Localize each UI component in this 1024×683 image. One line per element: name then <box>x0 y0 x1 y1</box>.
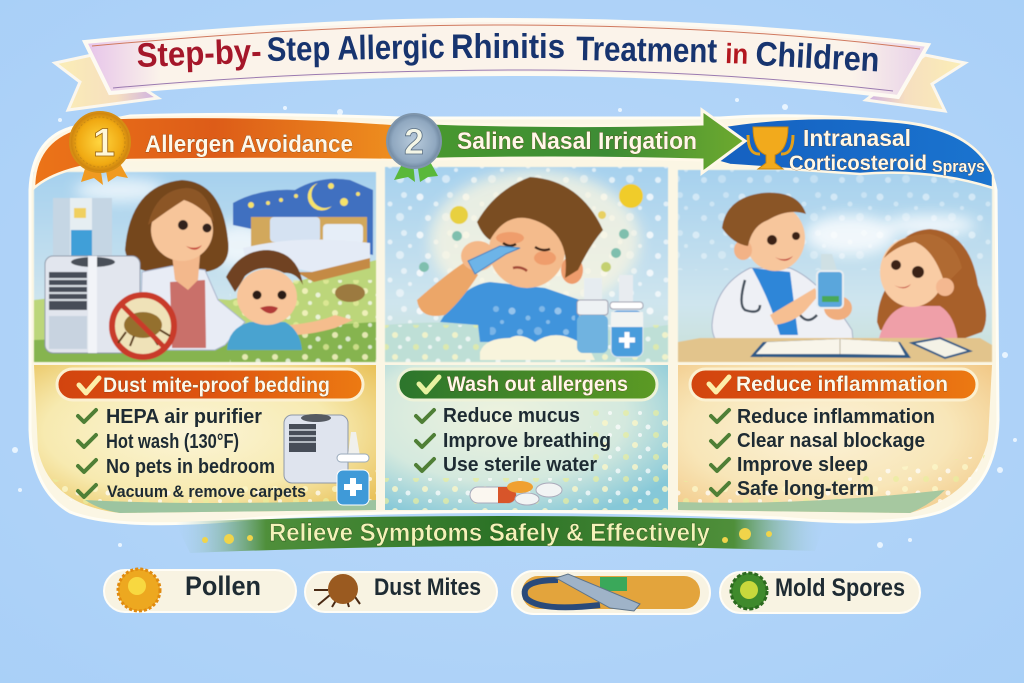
hair <box>477 177 603 278</box>
hair <box>722 193 806 246</box>
foam <box>480 335 595 360</box>
blue shirt <box>752 268 798 335</box>
icon: dust mite <box>314 590 360 607</box>
table <box>678 338 992 362</box>
title text: Children <box>755 35 880 79</box>
eyes <box>891 260 901 270</box>
pill heading: wash out allergens <box>398 369 657 400</box>
foam speckles <box>385 325 668 362</box>
mouth <box>513 267 527 271</box>
checklist: Vacuum & remove carpets <box>107 482 306 501</box>
panel: saline nasal irrigation <box>385 167 668 510</box>
eyes <box>178 220 188 230</box>
allergen chip: pollen: Pollen <box>185 571 261 601</box>
wood floor <box>522 576 700 609</box>
icon: trophy <box>748 127 793 169</box>
heading: intranasal corticosteroid sprays: Corticosteroid <box>789 152 927 175</box>
mother <box>125 180 245 350</box>
title text: in <box>725 38 749 70</box>
allergen chip: mold spores <box>720 572 920 613</box>
head <box>745 205 805 271</box>
medal: 2: 2 <box>404 121 424 162</box>
bed <box>243 217 370 282</box>
title banner body <box>85 20 928 97</box>
shirt <box>227 322 302 350</box>
mouth <box>894 284 911 288</box>
moon <box>308 183 332 210</box>
nasal spray <box>468 246 520 274</box>
sparkles <box>12 98 1017 548</box>
bottle left <box>577 278 608 353</box>
allergen chip: mold spores: Mold Spores <box>775 574 905 602</box>
title border top <box>92 25 920 49</box>
checklist: Improve breathing <box>443 430 611 452</box>
ribbon tail: left <box>55 55 158 110</box>
shirt <box>170 280 206 348</box>
arm and hand <box>770 288 818 325</box>
ear <box>734 240 752 260</box>
ribbon text: Relieve Symptoms Safely & Effectively <box>269 519 710 547</box>
ear <box>561 256 583 284</box>
pollen yellow <box>619 184 643 208</box>
checklist <box>78 406 306 501</box>
title text: Step-by- <box>136 33 262 75</box>
ribbon flowers <box>202 528 772 544</box>
doctor <box>712 193 853 348</box>
hair <box>226 250 303 292</box>
lower panel speckles <box>385 410 668 510</box>
title banner <box>55 20 965 111</box>
vacuum hose <box>525 580 600 607</box>
coat <box>712 268 853 348</box>
panel: allergen avoidance <box>34 172 376 513</box>
step 3 header band <box>712 118 993 188</box>
pollen yellow small <box>450 206 468 224</box>
lower panel: reduce inflammation list <box>678 365 992 513</box>
green ribbon banner <box>175 516 825 553</box>
checklist: HEPA air purifier <box>106 406 262 428</box>
checklist: Hot wash (130°F) <box>106 431 239 453</box>
small book <box>912 338 970 358</box>
stars <box>248 183 360 208</box>
head <box>489 212 565 288</box>
ear <box>936 278 954 296</box>
icon: pollen <box>118 569 160 611</box>
allergen chip: dust mites <box>305 572 497 612</box>
scene background <box>678 170 992 362</box>
lower panel bottom edge <box>678 490 945 513</box>
scene: child using nasal spray <box>385 167 668 362</box>
bottle <box>817 254 843 308</box>
stethoscope <box>742 280 817 320</box>
lower panel background <box>34 365 376 513</box>
coat <box>140 266 245 350</box>
pill heading: dust mite-proof bedding: Dust mite-proof bedding <box>103 374 330 397</box>
lower panel: wash out list <box>385 365 668 510</box>
ribbon tail: right <box>866 55 965 111</box>
mouth <box>775 256 793 261</box>
holding hand <box>824 296 852 320</box>
face <box>151 199 213 261</box>
lower panel background <box>678 365 992 513</box>
icon: air purifier <box>284 414 348 483</box>
vacuum wand <box>556 574 640 611</box>
green arrow <box>400 110 745 173</box>
shirt speckles <box>490 305 575 341</box>
title border bottom <box>113 70 893 91</box>
glow around child <box>430 170 640 310</box>
main panel frame <box>30 114 998 524</box>
girl <box>877 229 986 342</box>
mouth <box>260 306 278 314</box>
scene: doctor and girl <box>678 170 992 362</box>
checklist: Safe long-term <box>737 478 874 500</box>
pill heading: dust mite-proof bedding <box>57 369 363 400</box>
icon: spray bottle <box>337 432 369 505</box>
eyes <box>767 235 777 245</box>
lower panel meadow <box>45 470 376 513</box>
grass <box>34 260 376 362</box>
lower panel bottom edge <box>85 500 376 513</box>
title text: Rhinitis <box>451 28 565 66</box>
eyes <box>252 290 262 300</box>
allergen chip: vacuum on wood floor <box>512 571 710 614</box>
scene background <box>34 172 376 362</box>
checklist: Improve sleep <box>737 454 868 476</box>
checklist <box>416 405 611 476</box>
hair back <box>877 229 986 340</box>
medal: 1 <box>70 112 130 185</box>
title text: Step Allergic <box>266 28 445 69</box>
green box <box>600 577 627 591</box>
checklist: Clear nasal blockage <box>737 430 925 452</box>
clouds <box>805 215 975 255</box>
shirt <box>878 306 958 342</box>
pill heading: reduce inflammation <box>690 369 977 400</box>
shirt <box>440 282 580 342</box>
lower panel background <box>385 365 668 510</box>
blue band <box>712 118 993 188</box>
bottle right <box>610 275 643 357</box>
hair back <box>125 180 229 272</box>
checklist: Reduce inflammation <box>737 406 935 428</box>
checklist: Reduce mucus <box>443 405 580 427</box>
mouth <box>186 245 202 250</box>
checklist: No pets in bedroom <box>106 456 275 478</box>
neck <box>172 255 200 290</box>
step 2 header arrow <box>387 110 745 182</box>
fringe <box>884 234 962 285</box>
medal: 1: 1 <box>93 121 115 165</box>
heading: intranasal corticosteroid sprays <box>789 125 985 176</box>
title text <box>136 28 880 79</box>
open book <box>750 339 911 358</box>
air purifier <box>45 256 140 353</box>
heading: intranasal corticosteroid sprays: Sprays <box>932 157 985 176</box>
fringe <box>148 188 214 225</box>
allergen chip: pollen <box>104 569 296 612</box>
spores <box>419 211 629 272</box>
closed eyes <box>503 243 550 250</box>
panel: intranasal corticosteroid sprays <box>678 170 992 513</box>
night sky <box>233 179 373 255</box>
pill heading: wash out allergens: Wash out allergens <box>447 373 628 396</box>
checklist <box>711 406 935 500</box>
heading: allergen avoidance: Allergen Avoidance <box>145 131 353 158</box>
orange band <box>34 117 395 188</box>
foam field <box>385 322 668 362</box>
checklist: Use sterile water <box>443 454 597 476</box>
scene: mother and child with air purifier <box>34 172 376 362</box>
face <box>880 237 944 307</box>
hand <box>461 241 495 271</box>
icon: mold <box>731 573 767 609</box>
title text: Treatment <box>576 30 718 70</box>
pill heading: reduce inflammation: Reduce inflammation <box>736 373 948 396</box>
head <box>237 269 297 325</box>
allergen chip: dust mites: Dust Mites <box>374 574 481 601</box>
heading: intranasal corticosteroid sprays: Intranasal <box>803 125 911 151</box>
mite <box>335 284 365 302</box>
speckle texture <box>678 170 992 270</box>
lower panel meadow <box>678 455 985 513</box>
window <box>53 198 112 256</box>
clouds <box>75 178 270 267</box>
medal: 2 <box>387 114 441 182</box>
arm <box>417 262 478 316</box>
cheeks <box>496 232 556 265</box>
step 1 header band <box>34 112 395 188</box>
icon: pills <box>470 481 562 505</box>
arm <box>290 315 353 335</box>
no mites sign <box>112 295 174 357</box>
lower panel: dust mite list <box>34 365 376 513</box>
heading: saline nasal irrigation: Saline Nasal Irrigation <box>457 128 697 155</box>
scene background <box>385 167 668 362</box>
speckle texture <box>385 167 668 362</box>
child <box>226 250 353 350</box>
